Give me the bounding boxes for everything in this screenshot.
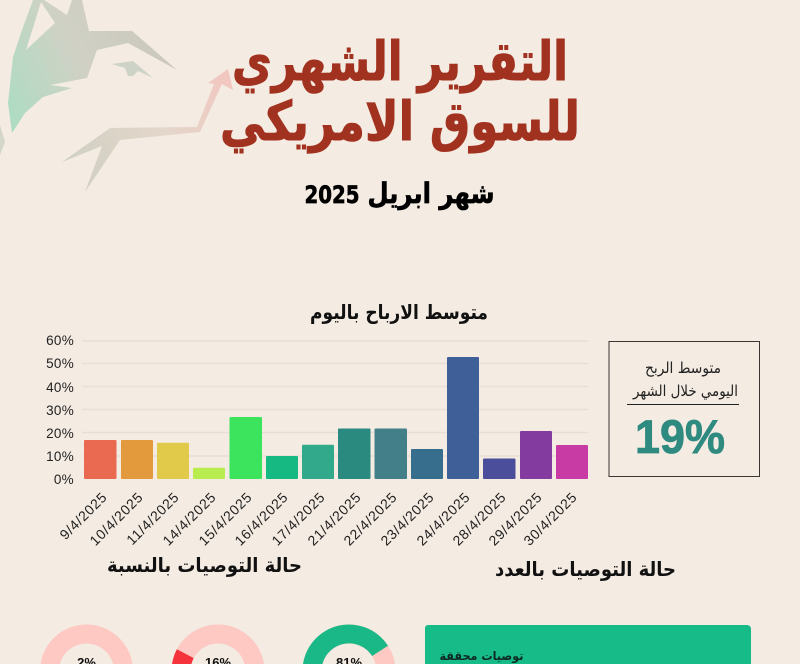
subtitle: month: 2025 — [304, 181, 360, 209]
x axis date labels: 29/4/2025 — [485, 489, 545, 549]
title — [220, 30, 580, 153]
donut: 16% — [172, 625, 264, 664]
x axis date labels: 24/4/2025 — [413, 489, 473, 549]
y axis labels: 50% — [46, 356, 74, 371]
y axis labels: 0% — [54, 472, 74, 487]
x axis date labels: 23/4/2025 — [377, 489, 437, 549]
y axis labels: 10% — [46, 449, 74, 464]
x axis date labels: 30/4/2025 — [520, 489, 580, 549]
card: achieved recommendations — [425, 625, 751, 664]
subtitle: month: شهر ابريل — [368, 177, 494, 210]
card label: توصيات محققة — [440, 649, 524, 664]
callout text: اليومي خلال الشهر — [632, 382, 738, 401]
x axis date labels: 10/4/2025 — [86, 489, 146, 549]
callout value: 19% — [635, 410, 725, 463]
x axis date labels: 17/4/2025 — [268, 489, 328, 549]
x axis date labels — [56, 489, 580, 549]
donut: 2% — [41, 625, 132, 664]
x axis date labels: 14/4/2025 — [159, 489, 219, 549]
title: للسوق الامريكي — [220, 90, 580, 153]
x axis date labels: 21/4/2025 — [304, 489, 364, 549]
donut: 81% — [303, 625, 395, 664]
x axis date labels: 16/4/2025 — [231, 489, 291, 549]
subtitle: month — [304, 177, 494, 210]
chart title: متوسط الارباح باليوم — [310, 300, 488, 324]
callout: monthly average daily profit — [609, 342, 760, 476]
callout text: متوسط الربح — [645, 359, 721, 377]
heading: status by percent: حالة التوصيات بالنسبة — [107, 553, 302, 577]
y axis labels: 30% — [46, 403, 74, 418]
x axis date labels: 28/4/2025 — [449, 489, 509, 549]
y axis labels: 20% — [46, 426, 74, 441]
x axis date labels: 22/4/2025 — [340, 489, 400, 549]
heading: status by count: حالة التوصيات بالعدد — [495, 557, 676, 581]
title: التقرير الشهري — [232, 30, 568, 93]
callout text — [632, 359, 738, 401]
x axis date labels: 9/4/2025 — [56, 489, 110, 543]
logo: wolf and arrow watermark — [0, 0, 233, 192]
x axis date labels: 11/4/2025 — [123, 489, 182, 548]
x axis date labels: 15/4/2025 — [195, 489, 255, 549]
y axis labels: 40% — [46, 380, 74, 395]
y axis labels — [46, 333, 74, 487]
bars — [84, 357, 588, 479]
y axis labels: 60% — [46, 333, 74, 348]
bar chart: daily average profit — [46, 333, 588, 549]
